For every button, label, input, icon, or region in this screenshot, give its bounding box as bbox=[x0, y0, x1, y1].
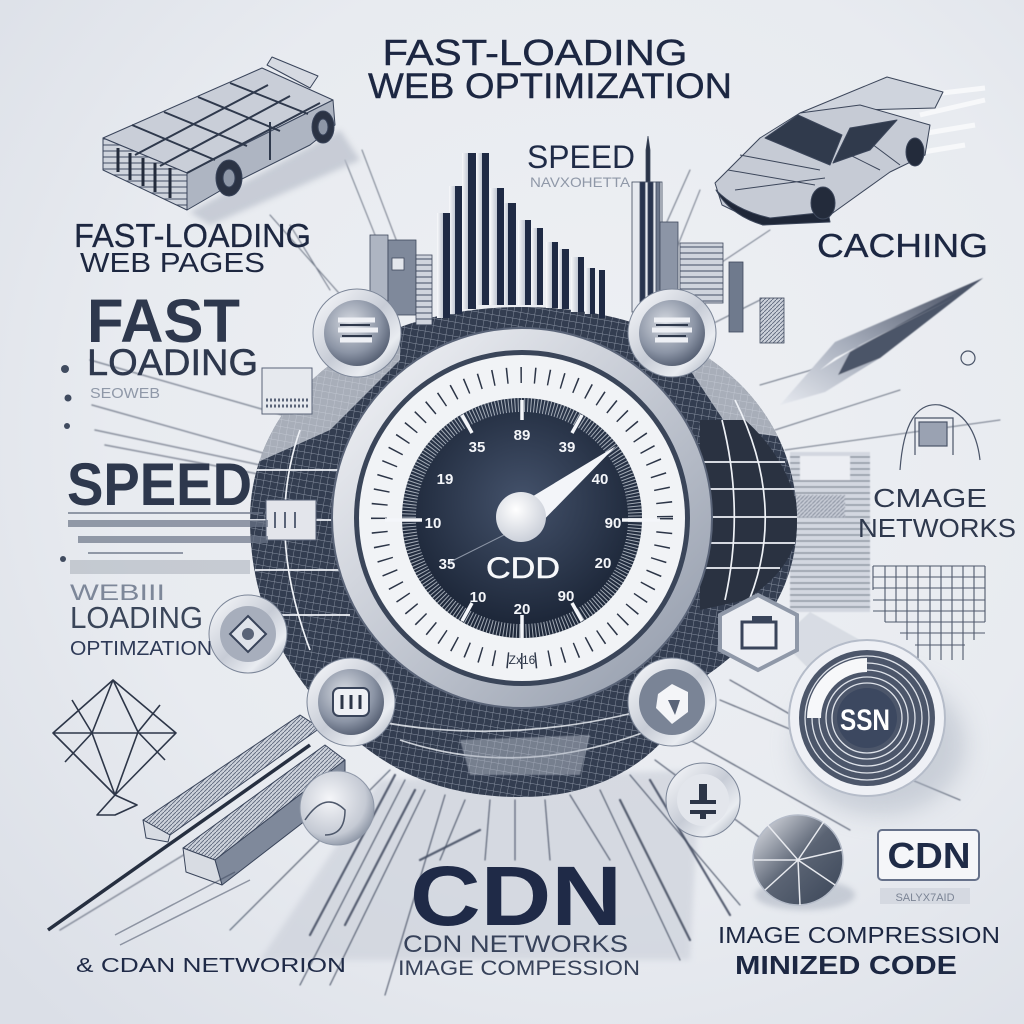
text: cdn networks image compession: CDN NETWORKS bbox=[403, 931, 628, 958]
CDN badge box bbox=[878, 830, 979, 904]
sketch rays radiating from the gauge bbox=[60, 150, 1000, 995]
gauge bbox=[332, 328, 712, 708]
globe light upper shoulders bbox=[259, 344, 778, 462]
gauge numbers: 89 bbox=[514, 427, 530, 444]
icon: wireframe diamond, lower left bbox=[53, 680, 176, 815]
car side face bbox=[187, 100, 335, 210]
text: fast-loading web pages: FAST-LOADING bbox=[74, 217, 311, 254]
bar chart at top center bbox=[437, 153, 605, 318]
sphere shadow bbox=[755, 880, 855, 910]
gauge numbers: 90 bbox=[558, 588, 574, 605]
badge: top right circular icon bbox=[628, 289, 716, 377]
badge hub bbox=[837, 688, 897, 748]
text: cdn networks image compession bbox=[398, 931, 640, 980]
badge concentric rings bbox=[805, 656, 929, 780]
car hood lines bbox=[728, 135, 900, 190]
text: cdn networks image compession: IMAGE COMPESSION bbox=[398, 957, 640, 980]
gauge numbers: 20 bbox=[595, 555, 611, 572]
text: image compression minized code: MINIZED CODE bbox=[735, 950, 957, 980]
car front face bbox=[103, 138, 187, 210]
text: garbled subtext under speed: NAVXOHETTA bbox=[530, 174, 631, 190]
text: image compression minized code: IMAGE COMPRESSION bbox=[718, 922, 1000, 948]
gauge major ticks bbox=[385, 400, 660, 640]
icon: wireframe monitor, right bbox=[900, 351, 980, 470]
text: caching: CACHING bbox=[817, 227, 988, 264]
chart: grid panel, right bbox=[873, 566, 985, 660]
CDN box label: CDN bbox=[888, 835, 970, 876]
globe with dark wireframe grid behind the gauge bbox=[240, 300, 805, 800]
text: faint scribble under loading: SEOWEB bbox=[90, 385, 160, 402]
text: image compression minized code bbox=[718, 922, 1000, 980]
lower rail top bbox=[183, 745, 345, 860]
gauge scale caption: Zx16 bbox=[509, 653, 536, 667]
gauge numbers bbox=[425, 427, 621, 618]
badge: lower tool icon bbox=[666, 763, 740, 837]
icon: chrome ball lower left bbox=[300, 771, 374, 845]
city skyline left bbox=[370, 235, 432, 325]
text: fast loading: LOADING bbox=[87, 342, 258, 383]
text: speed left: SPEED bbox=[67, 451, 252, 518]
globe dark right hemisphere bbox=[700, 420, 800, 610]
CDN box bbox=[878, 830, 979, 880]
gauge numbers: 90 bbox=[605, 515, 621, 532]
globe lighter center bottom scratch bbox=[460, 735, 590, 775]
car front grille bars bbox=[118, 148, 170, 198]
gauge label CDD: CDD bbox=[486, 552, 560, 585]
chart dark bars bbox=[443, 153, 605, 318]
car front bumper bbox=[716, 190, 830, 225]
CDN box caption: SALYX7AID bbox=[895, 892, 955, 904]
gauge dark dial bbox=[402, 398, 642, 638]
long dark rail bbox=[48, 745, 310, 930]
gauge numbers: 10 bbox=[470, 589, 486, 606]
gauge needle tail bbox=[450, 532, 510, 562]
icon: faceted sphere bbox=[753, 815, 855, 910]
sphere body bbox=[753, 815, 843, 905]
text: web loading optimization: WEBIII bbox=[70, 580, 165, 605]
text: web loading optimization: OPTIMZATION bbox=[70, 638, 212, 660]
gauge inner solid dial bbox=[416, 412, 628, 624]
gauge numbers: 40 bbox=[592, 471, 608, 488]
gauge hub bbox=[496, 492, 546, 542]
lower rail end bbox=[183, 848, 222, 885]
badge label: SSN bbox=[840, 704, 890, 737]
gauge outer bezel bbox=[332, 328, 712, 708]
text: cmage networks: NETWORKS bbox=[858, 513, 1016, 543]
car body bbox=[715, 105, 930, 225]
upper rail end bbox=[143, 820, 170, 842]
badge white arc bbox=[807, 658, 867, 718]
car top face bbox=[103, 68, 333, 173]
badge outer ring bbox=[789, 640, 945, 796]
car trunk and spoiler bbox=[800, 77, 943, 113]
city skyline right with tower bbox=[632, 136, 784, 343]
icon: server card, left bbox=[262, 368, 316, 540]
striped sketch panels beside the globe bbox=[780, 452, 870, 690]
gauge numbers: 35 bbox=[469, 439, 485, 456]
text: web loading optimization bbox=[70, 580, 212, 660]
gauge numbers: 19 bbox=[437, 471, 453, 488]
icon: bullet dots, left bbox=[60, 365, 72, 562]
text: fast loading: FAST bbox=[87, 287, 240, 355]
text: cmage networks bbox=[858, 483, 1016, 543]
car spoiler bbox=[267, 57, 318, 88]
globe mesh bbox=[240, 300, 805, 800]
car grid seams bbox=[132, 83, 320, 173]
title: WEB OPTIMIZATION bbox=[368, 67, 732, 106]
car windshield bbox=[765, 115, 842, 165]
globe white grid bbox=[250, 400, 797, 759]
badge: left target icon bbox=[209, 595, 287, 673]
gauge fine inner ticks bbox=[409, 405, 635, 631]
icon: sports car, top right bbox=[715, 77, 985, 225]
badge: top left circular icon bbox=[313, 289, 401, 377]
icon: isometric server block car, top left bbox=[103, 57, 360, 225]
gauge numbers: 10 bbox=[425, 515, 441, 532]
car side window bbox=[833, 120, 897, 163]
speed streaks bbox=[905, 88, 985, 155]
gauge numbers: 39 bbox=[559, 439, 575, 456]
text: big CDN: CDN bbox=[410, 849, 622, 943]
lower rail side bbox=[215, 760, 345, 885]
icon: server rails lower left bbox=[48, 715, 345, 945]
text: cmage networks: CMAGE bbox=[873, 483, 987, 513]
sketch rails lower bbox=[115, 872, 250, 945]
car wheels bbox=[811, 138, 924, 219]
text: speed top center: SPEED bbox=[527, 139, 635, 175]
badge: lower right shield icon bbox=[628, 658, 716, 746]
car wheels bbox=[216, 111, 334, 196]
chart light strips bbox=[437, 153, 590, 318]
text: fast-loading web pages: WEB PAGES bbox=[80, 247, 265, 278]
car shadow bbox=[190, 130, 360, 225]
gauge numbers: 20 bbox=[514, 601, 530, 618]
icon: sketched lines under speed bbox=[68, 512, 268, 574]
gauge dark ring bbox=[354, 350, 690, 686]
gauge white face bbox=[359, 355, 685, 681]
icon: hexagon badge bbox=[720, 595, 797, 670]
text: fast loading bbox=[87, 287, 258, 383]
soft grey tone under bottom fan bbox=[260, 770, 700, 960]
upper rail bbox=[143, 715, 320, 835]
gauge outer ticks bbox=[379, 375, 665, 661]
sphere facets bbox=[754, 820, 842, 905]
gauge needle bbox=[510, 446, 616, 534]
icon: SSN dial badge bbox=[789, 640, 965, 815]
icon: paper plane rocket, right bbox=[780, 278, 983, 405]
badge shadow bbox=[795, 675, 965, 815]
gauge numbers: 35 bbox=[439, 556, 455, 573]
text: web loading optimization: LOADING bbox=[70, 600, 203, 635]
badge: lower left icon bbox=[307, 658, 395, 746]
text: fast-loading web pages bbox=[74, 217, 311, 278]
title: FAST-LOADING bbox=[382, 32, 688, 73]
text: cdan networion: & CDAN NETWORION bbox=[76, 955, 346, 977]
title bbox=[368, 32, 732, 106]
badge dark disc bbox=[799, 650, 935, 786]
